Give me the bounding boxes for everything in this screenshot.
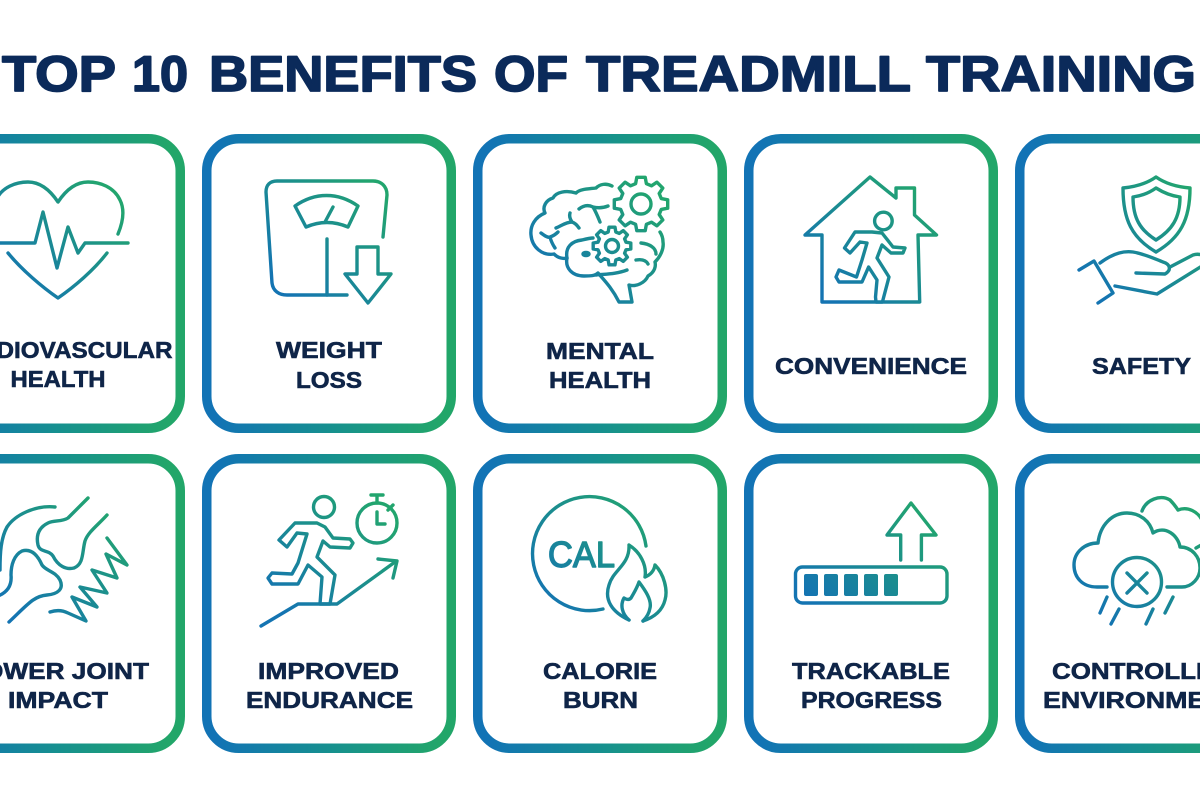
label: cardiovascular health	[0, 337, 173, 392]
panel: convenience	[749, 139, 993, 428]
icon: calorie circle with flame	[533, 497, 666, 621]
label: lower joint impact	[0, 658, 149, 713]
icon: runner in house	[805, 177, 936, 302]
panel: lower joint impact	[0, 459, 180, 748]
label: mental health: MENTAL	[546, 338, 654, 364]
label: trackable progress	[792, 658, 950, 713]
icon: progress bar with up arrow	[796, 503, 947, 603]
icon: heart with pulse	[0, 182, 128, 298]
panel: controlled environment	[1020, 459, 1200, 748]
title: BENEFITS	[209, 46, 477, 102]
panel: improved endurance	[207, 459, 451, 748]
panel: cardiovascular health	[0, 139, 180, 428]
panel: safety	[1020, 139, 1200, 428]
icon: brain with gears	[531, 177, 668, 302]
icon: joint with spring	[0, 498, 127, 622]
label: calorie burn	[543, 658, 657, 713]
panel: weight loss	[207, 139, 451, 428]
title: TRAINING	[926, 46, 1196, 102]
panel: trackable progress	[749, 459, 993, 748]
icon: scale with down arrow	[266, 181, 391, 303]
title: 10	[132, 46, 188, 102]
label: calorie burn: BURN	[563, 687, 638, 713]
label: weight loss: LOSS	[296, 367, 362, 393]
label: cardiovascular health: HEALTH	[10, 366, 106, 392]
title: TOP	[2, 46, 115, 102]
label: mental health: HEALTH	[549, 367, 651, 393]
label: controlled environment	[1043, 658, 1200, 713]
label: mental health	[546, 338, 654, 393]
label: trackable progress: PROGRESS	[801, 687, 942, 713]
label: calorie burn: CALORIE	[543, 658, 657, 684]
label: improved endurance: IMPROVED	[258, 658, 399, 684]
title: TREADMILL	[586, 46, 910, 102]
label: improved endurance	[246, 658, 413, 713]
label: safety: SAFETY	[1092, 353, 1191, 379]
label: convenience: CONVENIENCE	[775, 353, 967, 379]
icon: calorie circle with flame: CAL	[548, 534, 615, 575]
title: OF	[494, 46, 568, 102]
panel: mental health	[478, 139, 722, 428]
icon: runner with stopwatch and rising arrow	[261, 495, 397, 626]
icon: clouds with crossed-out rain	[1074, 498, 1200, 624]
icon: shield over hand	[1079, 177, 1200, 303]
label: improved endurance: ENDURANCE	[246, 687, 413, 713]
label: weight loss	[276, 337, 382, 393]
label: trackable progress: TRACKABLE	[792, 658, 950, 684]
label: lower joint impact: IMPACT	[8, 687, 108, 713]
panel: calorie burn	[478, 459, 722, 748]
label: weight loss: WEIGHT	[276, 337, 382, 363]
